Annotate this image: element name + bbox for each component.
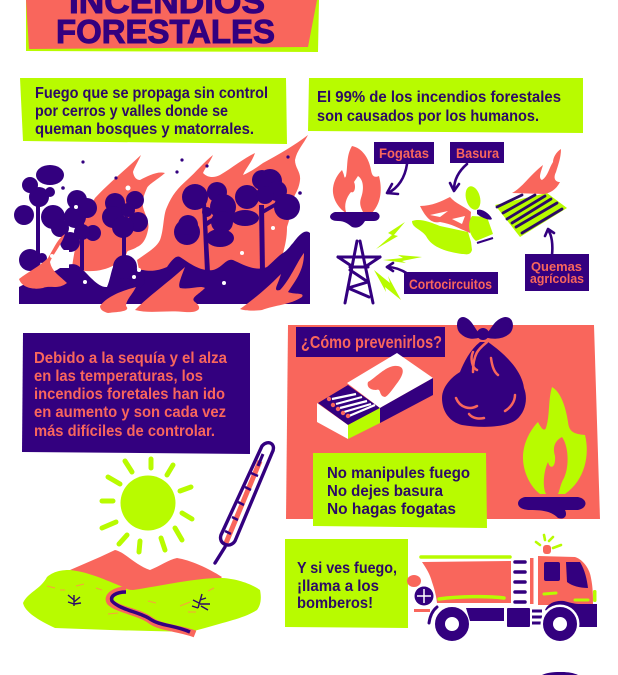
panel: prevention xyxy=(286,319,600,519)
firefighter call text box xyxy=(285,539,408,628)
arrow: Cortocircuitos xyxy=(387,263,408,274)
icons: lightning bolts xyxy=(374,222,422,300)
icon: electric tower xyxy=(338,241,380,303)
icon: lime campfire xyxy=(518,387,587,519)
definition text box: Fuego que se propaga sin control xyxy=(35,85,268,102)
arrow: Quemas agrícolas xyxy=(545,229,554,255)
climate text box: Debido a la sequía y el alza xyxy=(34,350,227,367)
icon: matchbox xyxy=(317,353,433,439)
heading: Cómo prevenirlos xyxy=(296,327,445,357)
icon: trash bag xyxy=(442,319,526,427)
definition text box: queman bosques y matorrales. xyxy=(35,121,254,138)
human causes text box xyxy=(308,78,583,133)
heading: Cómo prevenirlos: ¿Cómo prevenirlos? xyxy=(301,332,442,352)
label: Quemas agrícolas xyxy=(525,254,589,291)
title banner xyxy=(26,0,319,52)
climate text box: más difíciles de controlar. xyxy=(34,423,215,440)
label: Fogatas xyxy=(374,142,434,164)
icon: campfire xyxy=(330,146,381,228)
label: Cortocircuitos xyxy=(404,272,498,294)
climate text box xyxy=(22,333,250,454)
arrow: Fogatas xyxy=(387,164,407,194)
label: Fogatas: Fogatas xyxy=(379,145,429,161)
climate text box: en aumento y son cada vez xyxy=(34,404,226,421)
forest fire illustration xyxy=(14,135,310,313)
icon: thermometer xyxy=(215,443,273,563)
label: Cortocircuitos: Cortocircuitos xyxy=(409,276,492,292)
label: Basura: Basura xyxy=(456,145,499,161)
climate text box: incendios foretales han ido xyxy=(34,386,225,403)
label: Quemas agrícolas: agrícolas xyxy=(530,271,584,286)
prevention tips box: No manipules fuego xyxy=(327,465,470,482)
arrow: Basura xyxy=(450,164,467,191)
prevention tips box: No dejes basura xyxy=(327,483,443,500)
icon: burning field xyxy=(495,149,567,237)
firefighter call text box: bomberos! xyxy=(297,595,373,612)
label: Quemas agrícolas: Quemas xyxy=(531,259,582,274)
illustration: hills and river xyxy=(23,550,261,634)
bottom page fragment xyxy=(542,672,578,675)
label: Basura xyxy=(450,142,504,163)
firefighter call text box: Y si ves fuego, xyxy=(297,560,397,577)
firefighter call text box: ¡llama a los xyxy=(297,578,379,595)
title banner: FORESTALES xyxy=(56,14,275,51)
human causes text box: son causados por los humanos. xyxy=(317,108,539,125)
icon: fire truck xyxy=(407,535,597,644)
prevention tips box: No hagas fogatas xyxy=(327,501,456,518)
climate text box: en las temperaturas, los xyxy=(34,368,203,385)
definition text box xyxy=(20,78,287,144)
icon: trash xyxy=(412,185,493,254)
icon: sun xyxy=(102,459,192,552)
prevention tips box xyxy=(313,453,487,528)
human causes text box: El 99% de los incendios forestales xyxy=(317,89,561,106)
definition text box: por cerros y valles donde se xyxy=(35,103,228,120)
